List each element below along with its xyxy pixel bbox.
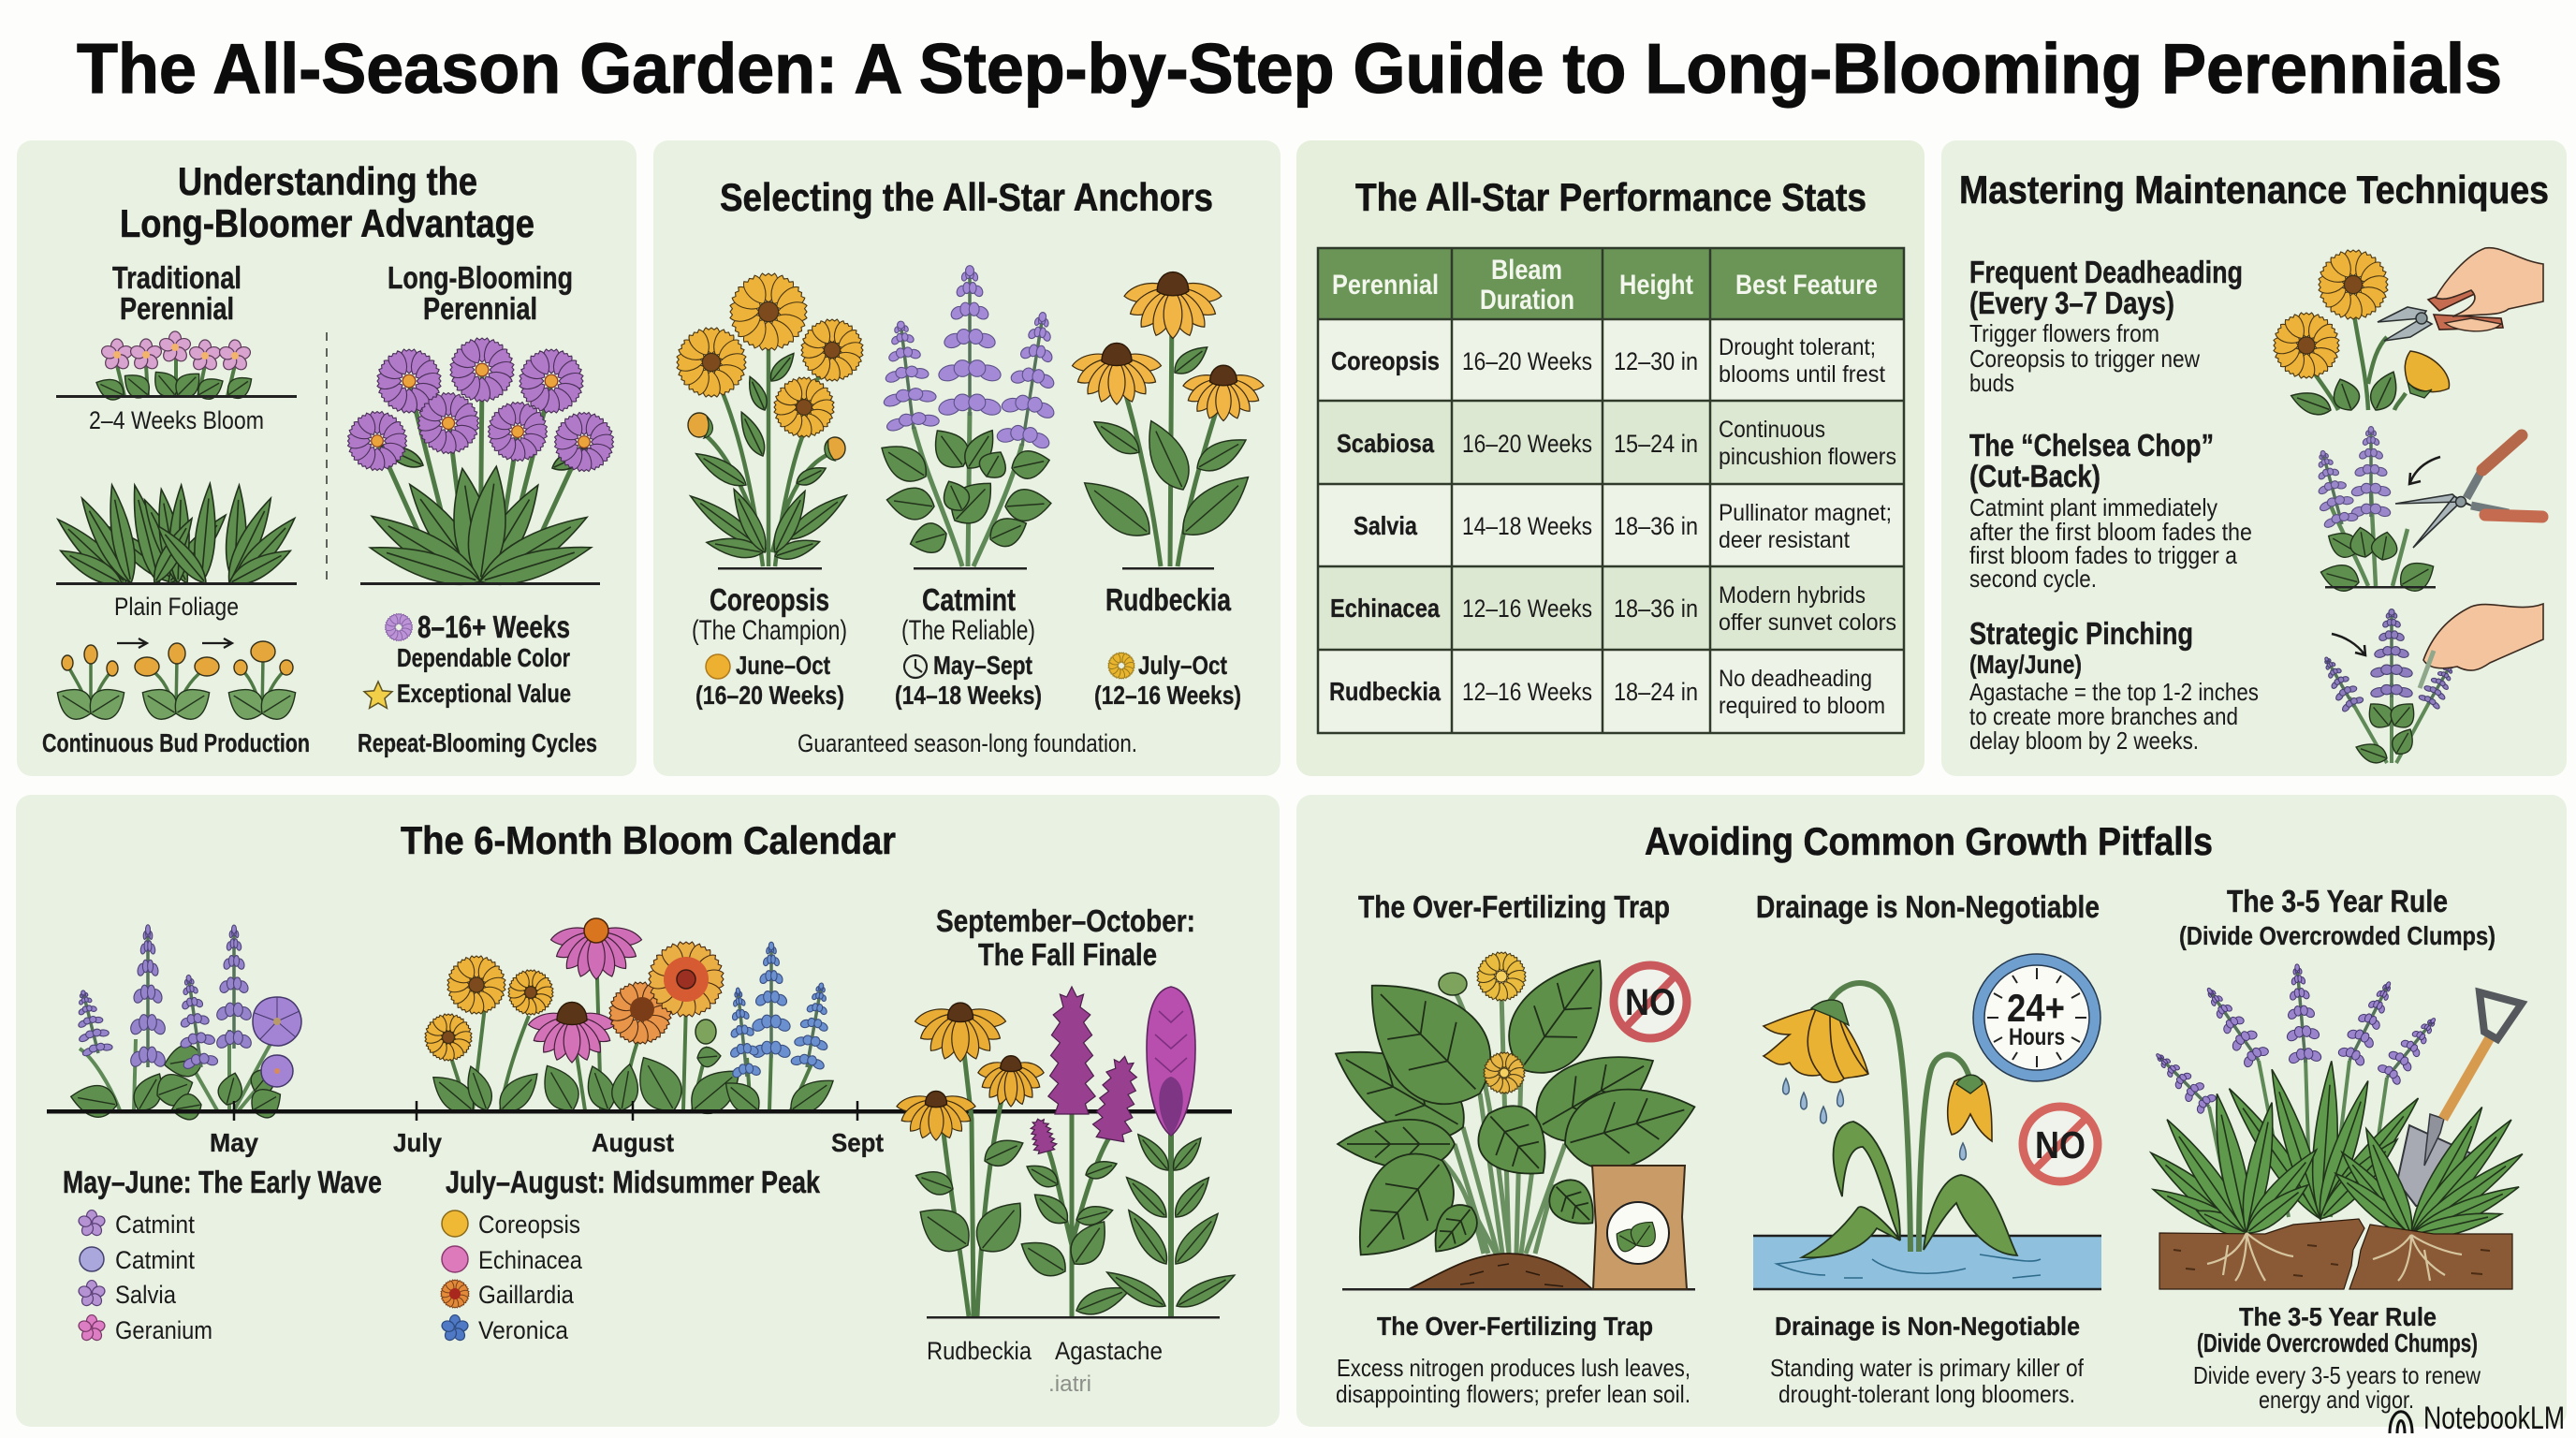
subheading: fall finale: The Fall Finale	[978, 937, 1157, 972]
caption: season-long foundation: Guaranteed season-long foundation.	[798, 729, 1137, 757]
illustration: midsummer peak plants	[424, 918, 841, 1123]
text: drainage: Drainage is Non-Negotiable	[1775, 1312, 2080, 1341]
caption: 2-4 weeks bloom: 2–4 Weeks Bloom	[89, 406, 264, 434]
subheading: traditional perennial: Perennial	[120, 291, 234, 326]
row: echinacea: offer sunvet colors	[1719, 609, 1896, 636]
illustration: fall plants	[896, 987, 1238, 1321]
wilted yellow flower	[1764, 1006, 1868, 1082]
text: 3-5 year rule: Divide every 3-5 years to renew	[2193, 1361, 2481, 1389]
text: chelsea chop: The “Chelsea Chop”	[1969, 428, 2214, 462]
panel: maintenance techniques	[1941, 140, 2567, 776]
stat: 8-16+ weeks: 8–16+ Weeks	[417, 609, 570, 644]
list: early wave: Catmint	[115, 1246, 195, 1274]
heading: pitfalls: Avoiding Common Growth Pitfalls	[1645, 819, 2213, 863]
text: frequent deadheading: Coreopsis to trigger new	[1969, 345, 2200, 373]
icon: clock	[904, 655, 927, 678]
row: scabiosa: 15–24 in	[1614, 430, 1698, 458]
row: echinacea: 12–16 Weeks	[1462, 594, 1592, 623]
heading: understanding: Long-Bloomer Advantage	[120, 201, 534, 245]
table header row: Height	[1619, 270, 1693, 301]
standing water	[1753, 1236, 2101, 1289]
text block: catmint: (14–18 Weeks)	[895, 681, 1042, 710]
soil with crack	[2159, 1219, 2512, 1289]
text: chelsea chop: after the first bloom fades the	[1969, 518, 2252, 546]
text: over-fertilizing trap	[1336, 1312, 1690, 1408]
text: chelsea chop: first bloom fades to trigger a	[1969, 541, 2237, 569]
row: coreopsis: blooms until frest	[1719, 361, 1885, 388]
text: over-fertilizing trap: The Over-Fertilizing Trap	[1377, 1312, 1653, 1341]
icon: NO sign: NO	[2035, 1123, 2086, 1167]
soil mound	[1409, 1254, 1592, 1289]
icon: geranium	[78, 1315, 106, 1343]
illustration: long-blooming plant	[348, 338, 614, 594]
shovel	[2397, 992, 2522, 1206]
row: rudbeckia	[1329, 666, 1885, 719]
icon: NO sign	[2023, 1107, 2098, 1181]
text: frequent deadheading: buds	[1969, 369, 2014, 397]
month: august: August	[592, 1128, 674, 1157]
text: 3-5 year rule: energy and vigor.	[2259, 1386, 2414, 1414]
table header row: Perennial	[1332, 270, 1439, 301]
panel: performance stats	[1296, 140, 1925, 776]
list: midsummer peak	[441, 1165, 821, 1344]
timeline axis	[47, 1101, 1232, 1157]
row: salvia	[1354, 500, 1892, 553]
text: 3-5 year rule: The 3-5 Year Rule	[2239, 1302, 2437, 1331]
text: 3-5 year rule: (Divide Overcrowded Chumps)	[2197, 1328, 2478, 1357]
panel: 6-month bloom calendar	[16, 795, 1280, 1427]
icon: star	[364, 682, 392, 708]
table header row	[1318, 248, 1904, 319]
illustration: catmint plant	[871, 266, 1072, 569]
text block: coreopsis: (16–20 Weeks)	[695, 681, 844, 710]
stat: dependable color: Dependable Color	[397, 643, 570, 672]
list: early wave: Catmint	[115, 1211, 195, 1239]
text block: rudbeckia: Rudbeckia	[1105, 582, 1232, 617]
text: chelsea chop: second cycle.	[1969, 565, 2097, 593]
illustration: short traditional flowers	[56, 331, 297, 404]
month: sept: Sept	[831, 1128, 884, 1157]
text: strategic pinching: Agastache = the top 1-2 inches	[1969, 678, 2259, 706]
label: faded liatris: .iatri	[1048, 1372, 1091, 1397]
icon: hand pinching	[2420, 604, 2543, 688]
stats table	[1318, 248, 1904, 733]
stat: exceptional value: Exceptional Value	[397, 679, 571, 708]
icon: gaillardia	[441, 1280, 469, 1308]
row: coreopsis	[1331, 334, 1885, 388]
text: chelsea chop: Catmint plant immediately	[1969, 493, 2217, 521]
text: strategic pinching: Strategic Pinching	[1969, 616, 2193, 651]
heading: understanding	[120, 159, 534, 245]
text block: coreopsis: (The Champion)	[692, 615, 847, 646]
row: salvia: 14–18 Weeks	[1462, 512, 1592, 540]
row: scabiosa: pincushion flowers	[1719, 444, 1896, 470]
table header row: Best Feature	[1735, 270, 1878, 301]
row: rudbeckia: No deadheading	[1719, 666, 1872, 692]
row: salvia: Salvia	[1354, 511, 1417, 540]
text block: rudbeckia: (12–16 Weeks)	[1094, 681, 1241, 710]
text: strategic pinching: delay bloom by 2 weeks.	[1969, 726, 2199, 755]
icon: half flower	[2405, 351, 2450, 398]
row: coreopsis: Drought tolerant;	[1719, 334, 1876, 360]
title: The All-Season Garden: A Step-by-Step Guide to Long-Blooming Perennials	[77, 29, 2502, 108]
row: coreopsis: Coreopsis	[1331, 346, 1440, 375]
text block: rudbeckia	[1094, 582, 1241, 710]
subheading: long-blooming perennial: Perennial	[423, 291, 537, 326]
illustration: chelsea chop with shears	[2305, 427, 2542, 597]
plant: agastache	[1014, 987, 1144, 1321]
icon: salvia	[78, 1281, 106, 1308]
roots	[2207, 1233, 2462, 1281]
label: agastache: Agastache	[1055, 1337, 1163, 1365]
illustration: deadheading with pruners	[2274, 248, 2543, 419]
table header row: Bleam	[1491, 255, 1562, 286]
subheading: fall finale	[936, 903, 1195, 972]
list: early wave: Geranium	[115, 1316, 212, 1344]
text: frequent deadheading: (Every 3–7 Days)	[1969, 286, 2174, 320]
text: over-fertilizing trap: disappointing flowers; prefer lean soil.	[1336, 1380, 1690, 1408]
text: strategic pinching: to create more branches and	[1969, 702, 2238, 730]
icon: pruners	[2378, 281, 2503, 341]
icon: NO sign	[1614, 965, 1687, 1038]
caption: plain foliage: Plain Foliage	[114, 593, 239, 621]
panel: selecting the all-star anchors	[653, 140, 1281, 776]
icon: shears	[2395, 435, 2542, 548]
list: early wave	[63, 1165, 382, 1344]
row: coreopsis: 16–20 Weeks	[1462, 347, 1592, 375]
text: chelsea chop: (Cut-Back)	[1969, 459, 2100, 493]
illustration: continuous bud production	[50, 638, 303, 726]
icon: catmint	[78, 1211, 106, 1238]
text: chelsea chop	[1969, 428, 2252, 593]
list: early wave: Salvia	[115, 1281, 177, 1309]
list: midsummer peak: Veronica	[478, 1316, 569, 1344]
illustration: rudbeckia plant	[1071, 272, 1265, 569]
icon: coreopsis	[442, 1211, 468, 1237]
row: rudbeckia: 18–24 in	[1614, 678, 1698, 706]
list: midsummer peak: Coreopsis	[478, 1211, 580, 1239]
subheading: traditional perennial	[112, 260, 242, 326]
icon: echinacea	[442, 1246, 468, 1272]
row: echinacea: 18–36 in	[1614, 594, 1698, 623]
heading: stats: The All-Star Performance Stats	[1355, 175, 1866, 219]
list: midsummer peak: Gaillardia	[478, 1281, 575, 1309]
row: salvia: deer resistant	[1719, 527, 1850, 553]
icon: NO sign: NO	[1625, 982, 1676, 1023]
panel: understanding the long-bloomer advantage	[17, 140, 637, 776]
text: 3-5 year rule	[2193, 1302, 2481, 1414]
text block: coreopsis: Coreopsis	[710, 582, 829, 617]
row: salvia: Pullinator magnet;	[1719, 500, 1892, 526]
text block: catmint: May–Sept	[933, 651, 1032, 680]
text block: coreopsis	[692, 582, 847, 710]
water drops	[1783, 1078, 1966, 1160]
list: early wave: May–June: The Early Wave	[63, 1165, 382, 1199]
row: echinacea: Modern hybrids	[1719, 582, 1866, 609]
illustration: over-fertilized plant	[1319, 938, 1705, 1290]
subheading: 3-5 year rule: The 3-5 Year Rule	[2227, 884, 2448, 918]
row: coreopsis: 12–30 in	[1614, 347, 1698, 375]
subheading: long-blooming perennial	[388, 260, 573, 326]
row: scabiosa	[1337, 417, 1896, 470]
plant: rudbeckia	[896, 1003, 1045, 1316]
illustration: plain foliage	[51, 482, 301, 592]
icon: veronica	[441, 1315, 469, 1343]
caption: repeat-blooming cycles: Repeat-Blooming Cycles	[358, 728, 597, 757]
illustration: early wave plants	[66, 925, 301, 1123]
text block: catmint	[895, 582, 1042, 710]
wilted bud	[1948, 1075, 1992, 1141]
row: rudbeckia: Rudbeckia	[1329, 677, 1441, 706]
lavender stems and spikes	[2147, 962, 2446, 1217]
clump leaves	[2144, 1061, 2528, 1244]
text: drainage	[1770, 1312, 2085, 1408]
list: midsummer peak: Echinacea	[478, 1246, 583, 1274]
heading: understanding: Understanding the	[178, 159, 477, 203]
subheading: drainage: Drainage is Non-Negotiable	[1756, 889, 2100, 924]
icon: orange cone	[584, 918, 608, 943]
text: strategic pinching	[1969, 616, 2259, 755]
row: scabiosa: 16–20 Weeks	[1462, 430, 1592, 458]
panel: growth pitfalls	[1296, 795, 2567, 1427]
text: drainage: Standing water is primary killer of	[1770, 1354, 2085, 1382]
row: echinacea: Echinacea	[1330, 594, 1440, 623]
icon: curved arrow	[2409, 457, 2440, 484]
text: frequent deadheading	[1969, 255, 2243, 397]
icon: gold bloom	[1108, 653, 1134, 679]
row: rudbeckia: required to bloom	[1719, 693, 1885, 719]
subheading: over-fertilizing: The Over-Fertilizing Trap	[1358, 889, 1670, 924]
row: scabiosa: Continuous	[1719, 417, 1825, 443]
text block: rudbeckia: July–Oct	[1138, 651, 1227, 680]
icon: 24+ hours clock	[1973, 954, 2100, 1081]
subheading: fall finale: September–October:	[936, 903, 1195, 938]
text: over-fertilizing trap: Excess nitrogen produces lush leaves,	[1337, 1354, 1690, 1382]
text: frequent deadheading: Frequent Deadheading	[1969, 255, 2243, 289]
subheading: long-blooming perennial: Long-Blooming	[388, 260, 573, 295]
divider: dashed comparison line	[326, 332, 328, 581]
icon: fertilizer bag	[1592, 1166, 1687, 1289]
illustration: coreopsis plant	[677, 273, 863, 569]
heading: calendar: The 6-Month Bloom Calendar	[401, 818, 896, 862]
text: strategic pinching: (May/June)	[1969, 650, 2082, 679]
text: drainage: drought-tolerant long bloomers.	[1778, 1380, 2075, 1408]
icon: catmint circle	[80, 1247, 104, 1271]
illustration: wilted plant in standing water	[1753, 954, 2101, 1289]
row: scabiosa: Scabiosa	[1337, 429, 1434, 458]
illustration: dividing overcrowded clump	[2144, 962, 2528, 1289]
illustration: pinching agastache	[2315, 604, 2543, 767]
subheading: 3-5 year rule	[2179, 884, 2496, 950]
text: frequent deadheading: Trigger flowers from	[1969, 319, 2159, 347]
month: july: July	[393, 1128, 442, 1157]
icon: 24+ hours clock: 24+	[2007, 986, 2065, 1030]
subheading: 3-5 year rule: (Divide Overcrowded Clumps)	[2179, 921, 2496, 950]
label: rudbeckia: Rudbeckia	[927, 1337, 1032, 1365]
text block: catmint: Catmint	[922, 582, 1016, 617]
row: rudbeckia: 12–16 Weeks	[1462, 678, 1592, 706]
row: salvia: 18–36 in	[1614, 512, 1698, 540]
subheading: traditional perennial: Traditional	[112, 260, 242, 295]
icon: 24+ hours clock: Hours	[2009, 1024, 2065, 1050]
text block: catmint: (The Reliable)	[901, 615, 1035, 646]
row: echinacea	[1330, 582, 1896, 636]
icon: hand holding pruners	[2436, 248, 2543, 331]
table header row: Duration	[1480, 285, 1574, 315]
list: midsummer peak: July–August: Midsummer Peak	[446, 1165, 821, 1199]
icon: yellow bloom	[706, 654, 730, 679]
icon: curved arrow	[2332, 634, 2365, 655]
icon: purple bloom	[386, 614, 412, 640]
heading: anchors: Selecting the All-Star Anchors	[720, 175, 1213, 219]
text block: coreopsis: June–Oct	[736, 651, 830, 680]
caption: continuous bud production: Continuous Bud Production	[42, 728, 310, 757]
plant: liatris	[1103, 987, 1238, 1316]
month: may: May	[210, 1128, 258, 1157]
